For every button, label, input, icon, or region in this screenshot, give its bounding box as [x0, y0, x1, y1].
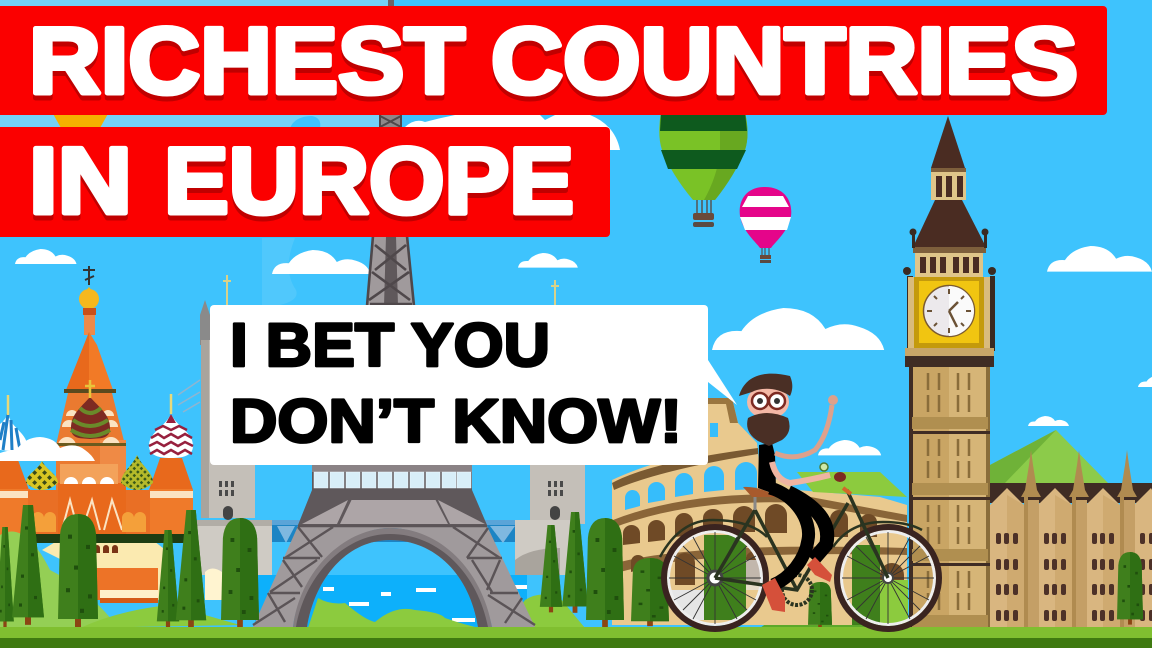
- shoes: [762, 578, 785, 612]
- icon: yellow balloon: [52, 112, 109, 128]
- trees: [0, 505, 1143, 628]
- title banner: line two: [0, 127, 610, 238]
- head: [747, 385, 789, 419]
- river: [255, 575, 527, 627]
- pink zigzag dome: [149, 394, 193, 458]
- speech bubble text: [230, 311, 682, 455]
- green hill behind colosseum: [797, 472, 907, 497]
- striped dome: [71, 380, 110, 439]
- orange towers: [149, 458, 193, 490]
- st basil's cathedral: [0, 266, 193, 603]
- title banner: line two: EUROPE: [164, 128, 574, 233]
- near leg: [770, 488, 809, 585]
- title banner: line one: COUNTRIES: [491, 8, 1078, 113]
- title banner: line one: RICHEST: [29, 13, 465, 118]
- arms: [775, 405, 832, 457]
- title banner: line one: COUNTRIES: [491, 13, 1078, 118]
- icon: green hot air balloon: [659, 112, 748, 227]
- speech bubble: [210, 305, 737, 465]
- torso: [758, 443, 790, 498]
- colosseum: [612, 398, 907, 625]
- light sky patches: [0, 0, 388, 305]
- clouds: [15, 115, 1152, 455]
- far leg: [788, 492, 827, 560]
- speech bubble text: I BET YOU: [230, 311, 550, 379]
- ground: [0, 627, 1152, 648]
- green hills: [0, 532, 990, 630]
- title banner: line one: [0, 6, 1107, 118]
- big ben: [903, 116, 996, 632]
- title banner: line two: EUROPE: [164, 133, 574, 238]
- lower building: [42, 538, 172, 600]
- bicycle: [660, 487, 939, 629]
- eiffel tower upper: [367, 0, 414, 306]
- cyclist: [739, 374, 846, 612]
- main lower body: [28, 490, 150, 536]
- title banner: line one: RICHEST: [29, 8, 465, 113]
- houses of parliament: [990, 450, 1152, 627]
- title banner: line two: IN: [29, 133, 132, 238]
- blue striped dome: [0, 395, 28, 451]
- tower bridge: [178, 275, 585, 600]
- mountain: [990, 430, 1108, 483]
- icon: pink hot air balloon: [740, 187, 791, 263]
- speech bubble text: DON’T KNOW!: [230, 387, 682, 455]
- title banner: line two: IN: [29, 128, 132, 233]
- small yellow-green domes: [26, 461, 58, 490]
- eiffel tower lower: [253, 465, 535, 627]
- cloud over cathedral: [0, 437, 95, 461]
